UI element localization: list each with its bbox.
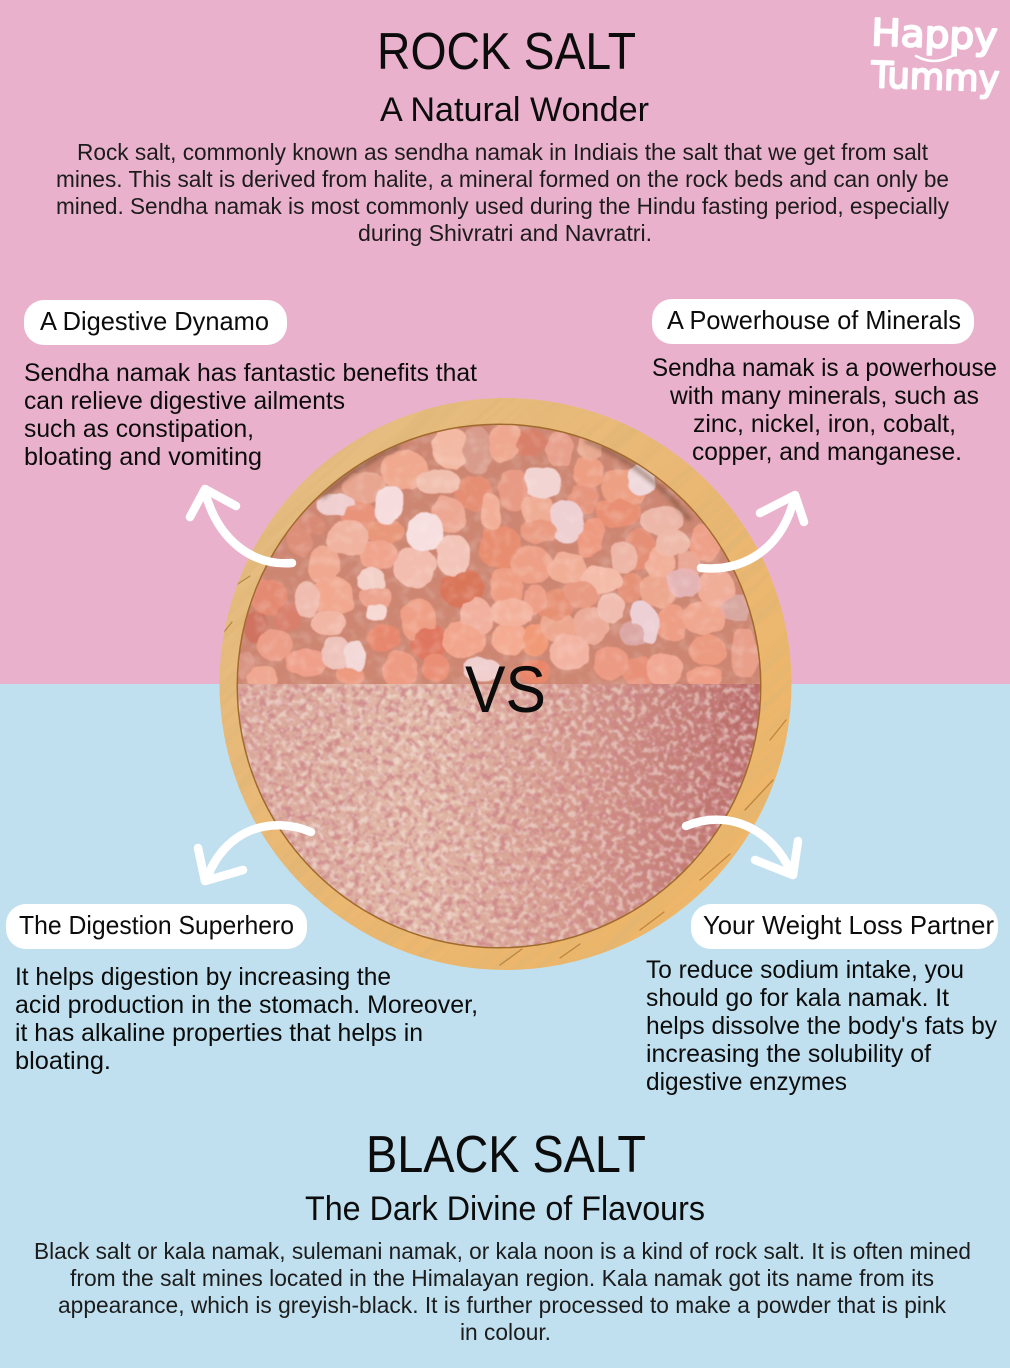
text block: digestion superhero: acid production in the stomach. Moreover,: [15, 991, 478, 1019]
text block: powerhouse of minerals: copper, and manganese.: [692, 438, 962, 466]
text block: weight loss partner: should go for kala namak. It: [646, 984, 949, 1012]
text block: rock salt intro: Rock salt, commonly known as sendha namak in Indiais the salt that we get from salt: [77, 139, 929, 165]
text block: rock salt intro: mines. This salt is derived from halite, a mineral formed on the rock beds and can only be: [56, 166, 949, 192]
label: VS: VS: [465, 652, 546, 726]
bowl: wooden rim: [220, 398, 792, 970]
text block: digestive dynamo: bloating and vomiting: [24, 443, 262, 471]
photo: black salt powder: [230, 684, 770, 954]
text block: digestion superhero: [15, 963, 478, 1075]
title: rock salt: ROCK SALT: [377, 23, 636, 81]
text block: weight loss partner: increasing the solubility of: [646, 1040, 931, 1068]
text block: digestive dynamo: [24, 359, 477, 471]
text block: digestion superhero: it has alkaline properties that helps in: [15, 1019, 423, 1047]
text block: digestion superhero: It helps digestion by increasing the: [15, 963, 391, 991]
text block: powerhouse of minerals: zinc, nickel, iron, cobalt,: [693, 410, 956, 438]
pill: a digestive dynamo: A Digestive Dynamo: [40, 306, 269, 336]
photo: rock salt crystals: [230, 420, 770, 954]
pill: a digestive dynamo: [24, 300, 287, 345]
text block: rock salt intro: mined. Sendha namak is most commonly used during the Hindu fasting period, especially: [56, 193, 949, 219]
arrow: to digestion superhero: [198, 825, 311, 881]
pill: a powerhouse of minerals: A Powerhouse of Minerals: [667, 305, 961, 335]
text block: black salt intro: Black salt or kala namak, sulemani namak, or kala noon is a kind of rock salt. It is often mined: [34, 1238, 971, 1264]
text block: black salt intro: from the salt mines located in the Himalayan region. Kala namak got its name from its: [70, 1265, 934, 1291]
subtitle: the dark divine of flavours: The Dark Divine of Flavours: [305, 1190, 705, 1228]
text block: black salt intro: in colour.: [460, 1319, 551, 1345]
text block: black salt intro: [34, 1238, 971, 1345]
blue background panel: [0, 684, 1010, 1368]
text block: digestive dynamo: Sendha namak has fantastic benefits that: [24, 359, 477, 387]
arrow: to digestive dynamo: [190, 489, 292, 563]
text block: weight loss partner: helps dissolve the body's fats by: [646, 1012, 997, 1040]
text block: digestive dynamo: such as constipation,: [24, 415, 254, 443]
pill: the digestion superhero: [6, 904, 307, 949]
pink background panel: [0, 0, 1010, 684]
text block: rock salt intro: [56, 139, 949, 246]
logo: happy tummy: [870, 11, 1000, 100]
text block: weight loss partner: digestive enzymes: [646, 1068, 847, 1096]
title: black salt: BLACK SALT: [366, 1126, 646, 1184]
pill: a powerhouse of minerals: [652, 299, 974, 344]
subtitle: a natural wonder: A Natural Wonder: [380, 91, 649, 129]
text block: powerhouse of minerals: with many minerals, such as: [669, 382, 979, 410]
text block: digestion superhero: bloating.: [15, 1047, 111, 1075]
pill: your weight loss partner: [691, 904, 998, 949]
text block: weight loss partner: [646, 956, 997, 1096]
arrow: to powerhouse of minerals: [701, 495, 804, 568]
logo: happy tummy: Tummy: [870, 55, 1000, 100]
text block: weight loss partner: To reduce sodium intake, you: [646, 956, 964, 984]
text block: digestive dynamo: can relieve digestive ailments: [24, 387, 345, 415]
text block: powerhouse of minerals: Sendha namak is a powerhouse: [652, 354, 997, 382]
text block: powerhouse of minerals: [652, 354, 997, 466]
text block: black salt intro: appearance, which is greyish-black. It is further processed to make a powder that is pink: [58, 1292, 946, 1318]
text block: rock salt intro: during Shivratri and Navratri.: [358, 220, 652, 246]
logo: happy tummy: Happy: [871, 11, 998, 58]
pill: the digestion superhero: The Digestion Superhero: [19, 910, 294, 940]
arrow: to weight loss partner: [686, 820, 798, 875]
pill: your weight loss partner: Your Weight Loss Partner: [703, 910, 994, 940]
